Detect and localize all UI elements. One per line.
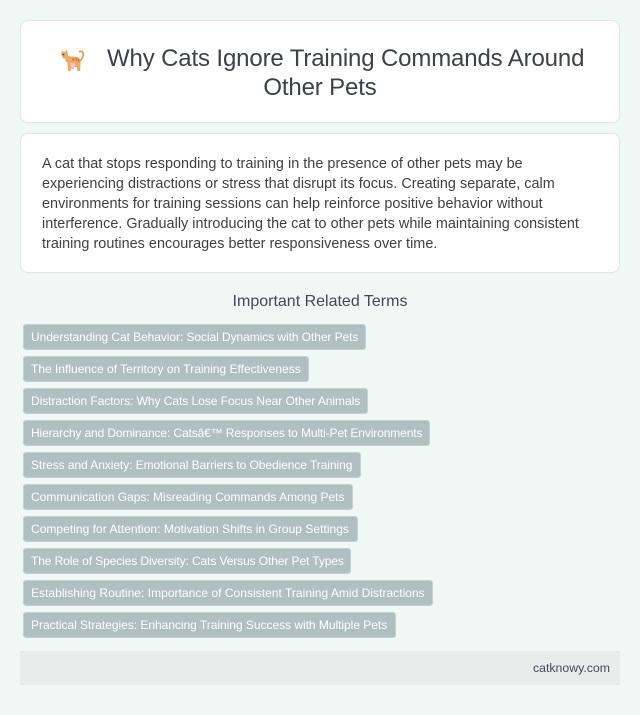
- list: related term tags: [23, 324, 433, 638]
- tag 8: [23, 548, 351, 574]
- icon: cat: [61, 50, 84, 71]
- description text: [42, 156, 579, 252]
- tag 4: [23, 420, 430, 446]
- tag 3: [23, 388, 368, 414]
- tag 1: [23, 324, 366, 350]
- tag 9: Establishing Routine: Importance of Consistent Training Amid Distractions: [31, 586, 425, 600]
- tag 2: The Influence of Territory on Training Effectiveness: [31, 362, 301, 376]
- tag 10: [23, 612, 396, 638]
- panel: description card: [20, 133, 620, 273]
- tag 5: Stress and Anxiety: Emotional Barriers to Obedience Training: [31, 458, 352, 472]
- description text: environments for training sessions can help reinforce positive behavior without: [42, 196, 543, 212]
- description text: A cat that stops responding to training in the presence of other pets may be: [42, 156, 523, 172]
- description text: experiencing distractions or stress that disrupt its focus. Creating separate, calm: [42, 176, 555, 192]
- tag 2: [23, 356, 309, 382]
- tag 4: Hierarchy and Dominance: Catsâ€™ Responses to Multi-Pet Environments: [31, 426, 422, 440]
- tag 1: Understanding Cat Behavior: Social Dynamics with Other Pets: [31, 330, 358, 344]
- tag 7: [23, 516, 358, 542]
- heading: important related terms: Important Related Terms: [233, 293, 407, 310]
- title: [107, 45, 584, 101]
- description text: interference. Gradually introducing the cat to other pets while maintaining consistent: [42, 216, 579, 232]
- tag 10: Practical Strategies: Enhancing Training Success with Multiple Pets: [31, 618, 387, 632]
- tag 6: [23, 484, 353, 510]
- tag 8: The Role of Species Diversity: Cats Versus Other Pet Types: [31, 554, 344, 568]
- title: Why Cats Ignore Training Commands Around: [107, 45, 584, 72]
- footer source text: catknowy.com: [533, 661, 610, 675]
- tag 3: Distraction Factors: Why Cats Lose Focus Near Other Animals: [31, 394, 360, 408]
- tag 9: [23, 580, 433, 606]
- tag 6: Communication Gaps: Misreading Commands Among Pets: [31, 490, 344, 504]
- title: Other Pets: [263, 74, 377, 101]
- panel: title card: [20, 20, 620, 123]
- tag 5: [23, 452, 361, 478]
- description text: training routines encourages better responsiveness over time.: [42, 236, 437, 252]
- footer bar: [20, 651, 620, 685]
- tag 7: Competing for Attention: Motivation Shifts in Group Settings: [31, 522, 349, 536]
